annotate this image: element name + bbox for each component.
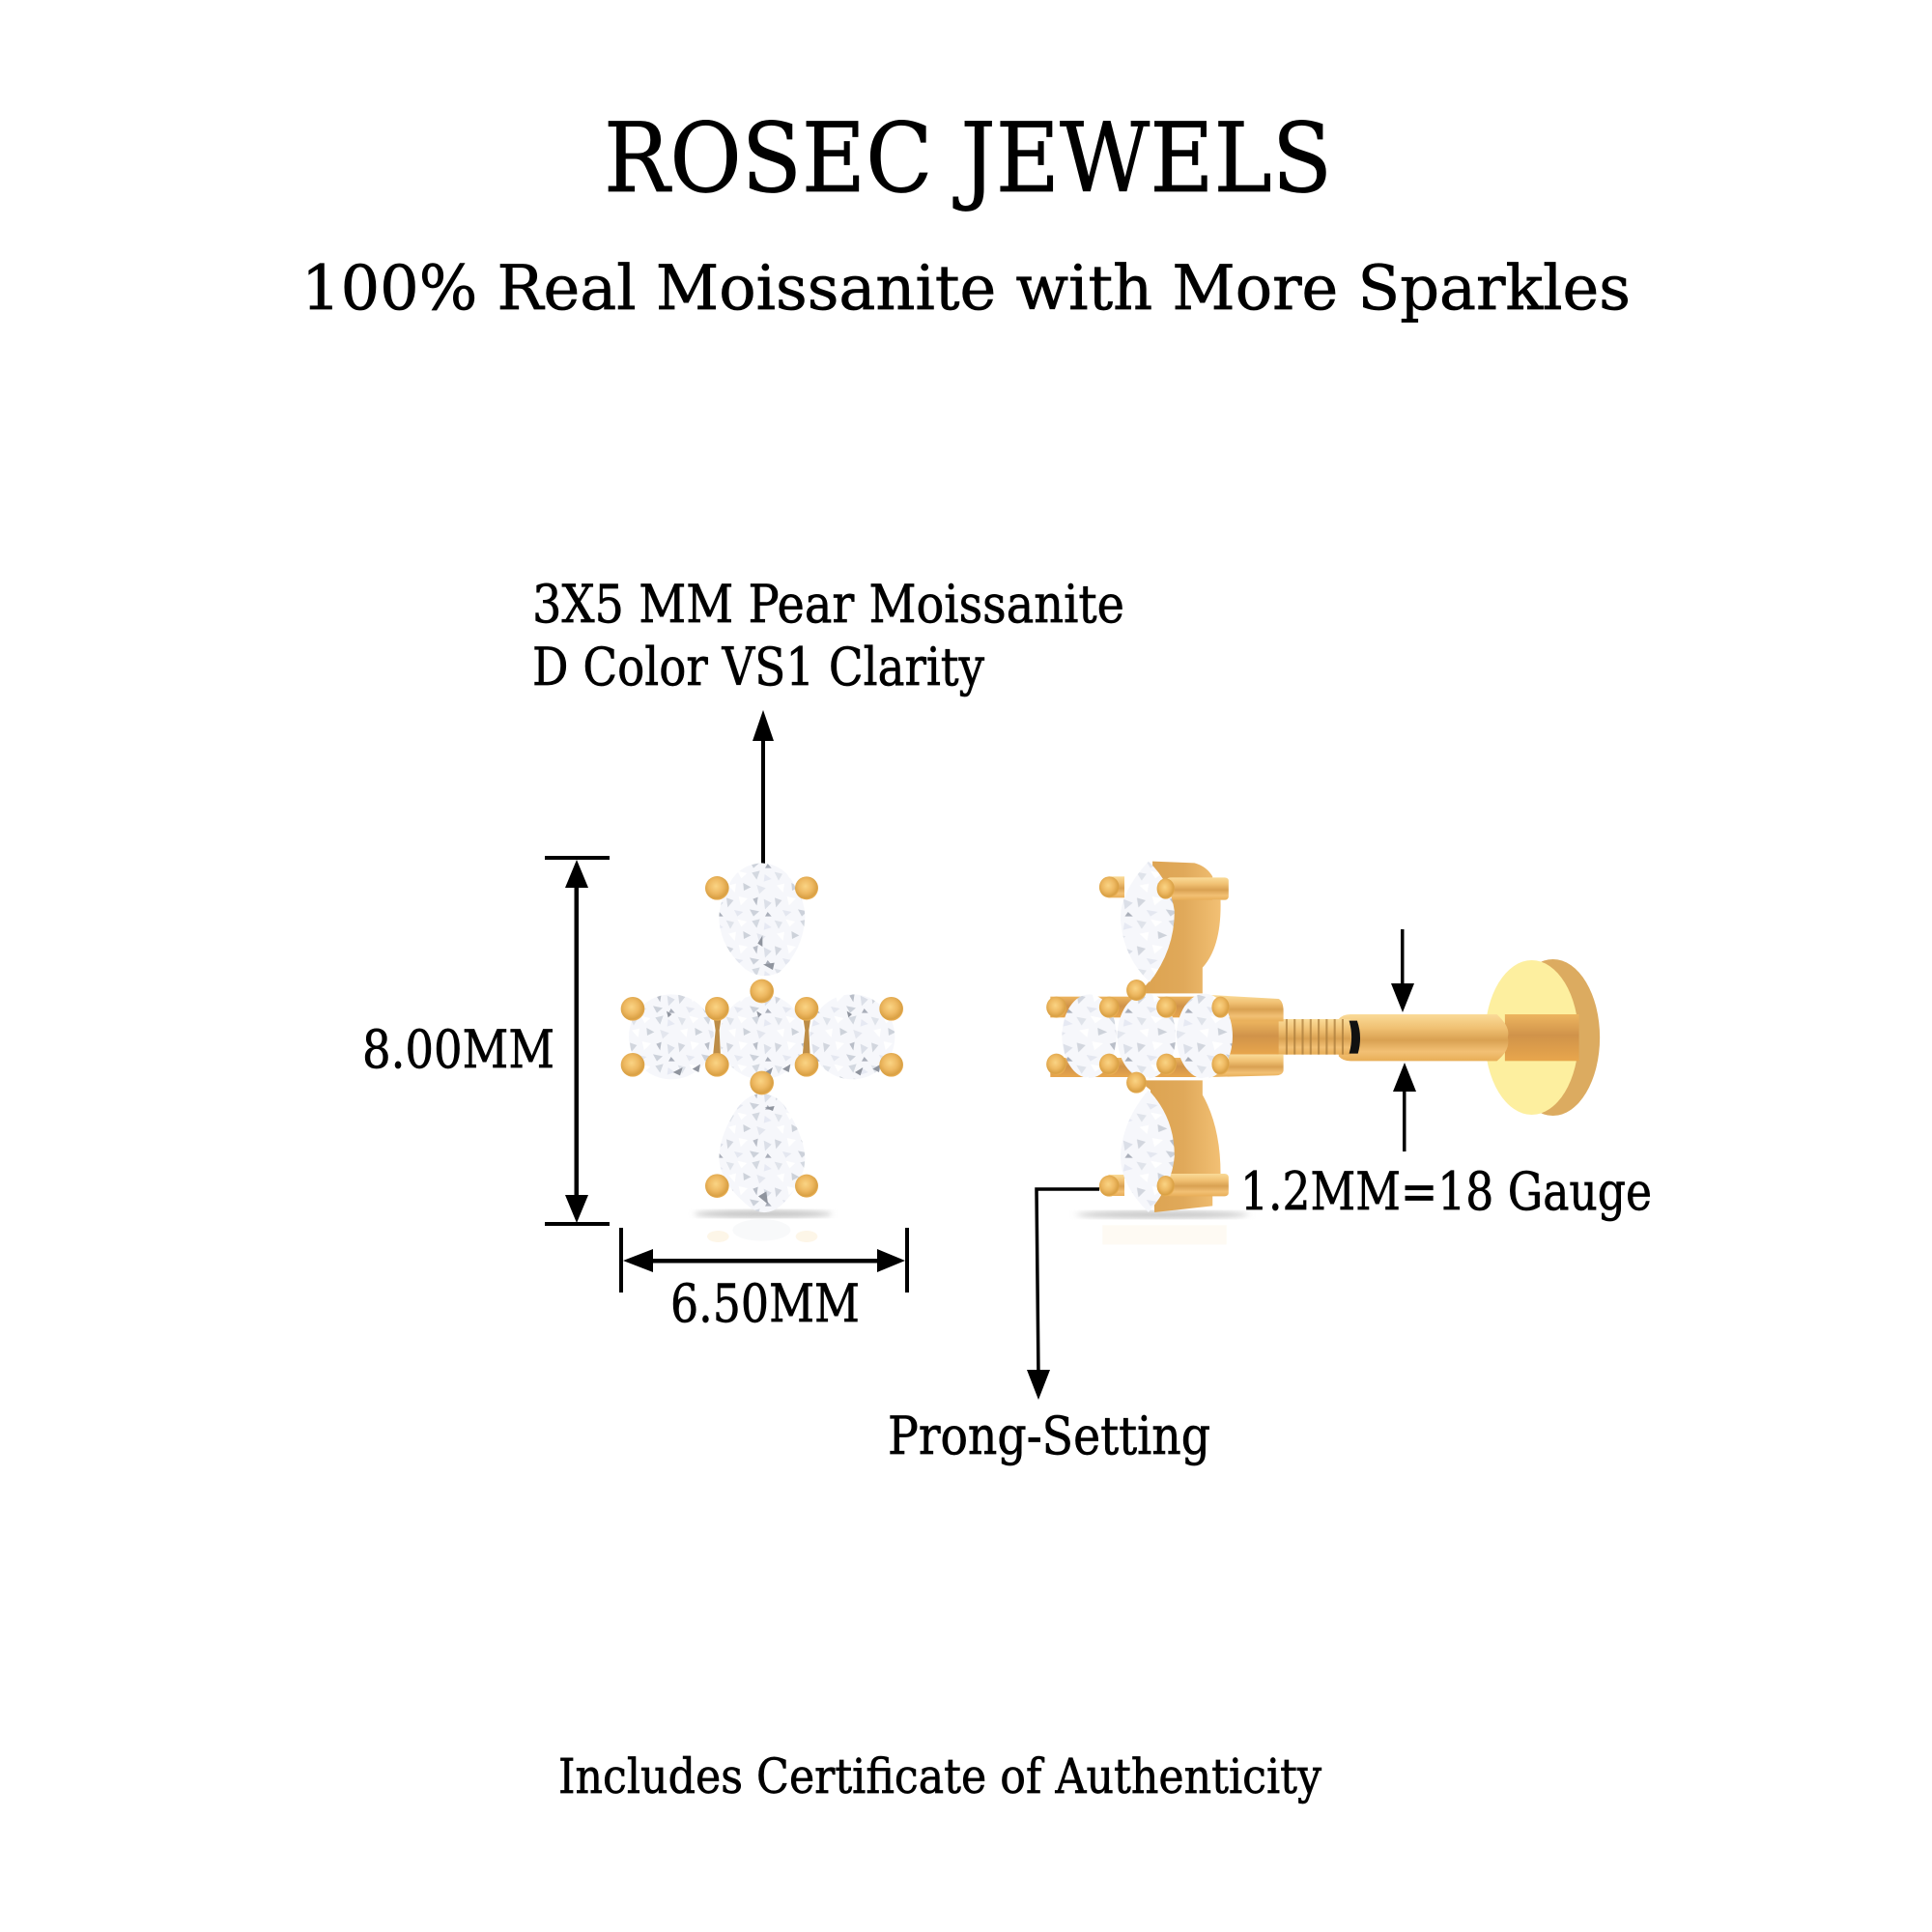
width label: 6.50MM <box>670 1273 860 1334</box>
bottom pear stone <box>719 1094 805 1212</box>
upper pear setting <box>1139 862 1221 993</box>
prong setting label: Prong-Setting <box>888 1406 1210 1466</box>
footer note: Includes Certificate of Authenticity <box>558 1748 1322 1804</box>
stone dark facets <box>667 935 881 1205</box>
stone specification label <box>532 574 1124 697</box>
side view of labret stud <box>1046 862 1600 1244</box>
black ring <box>1350 1021 1360 1054</box>
gauge label: 1.2MM=18 Gauge <box>1240 1161 1652 1222</box>
stone specification label: D Color VS1 Clarity <box>532 637 984 697</box>
side stones <box>1062 862 1233 1212</box>
arrow: prong setting callout <box>1027 1189 1099 1400</box>
gold prongs <box>621 876 903 1198</box>
side prongs <box>1046 876 1230 1197</box>
front view of cross stud <box>621 863 903 1242</box>
height dimension: 8.00MM <box>545 856 610 1226</box>
round stones <box>629 994 895 1079</box>
arrow: stone callout <box>753 710 774 866</box>
side prong bars <box>1108 876 1229 1196</box>
connecting bars <box>713 1017 810 1056</box>
shadow and reflection <box>1076 1210 1249 1244</box>
shadow and reflection <box>694 1210 833 1242</box>
middle gold rows <box>1050 995 1284 1077</box>
flat back disc <box>1485 959 1600 1116</box>
subtitle: 100% Real Moissanite with More Sparkles <box>301 253 1631 325</box>
width dimension: 6.50MM <box>619 1228 909 1293</box>
top pear stone <box>719 863 805 976</box>
stone specification label: 3X5 MM Pear Moissanite <box>532 574 1124 635</box>
post <box>1339 1014 1579 1061</box>
height label: 8.00MM <box>362 1019 554 1080</box>
threaded section <box>1277 1019 1350 1055</box>
lower pear setting <box>1139 1080 1221 1212</box>
arrows: post gauge <box>1391 929 1416 1151</box>
title: ROSEC JEWELS <box>604 103 1332 214</box>
